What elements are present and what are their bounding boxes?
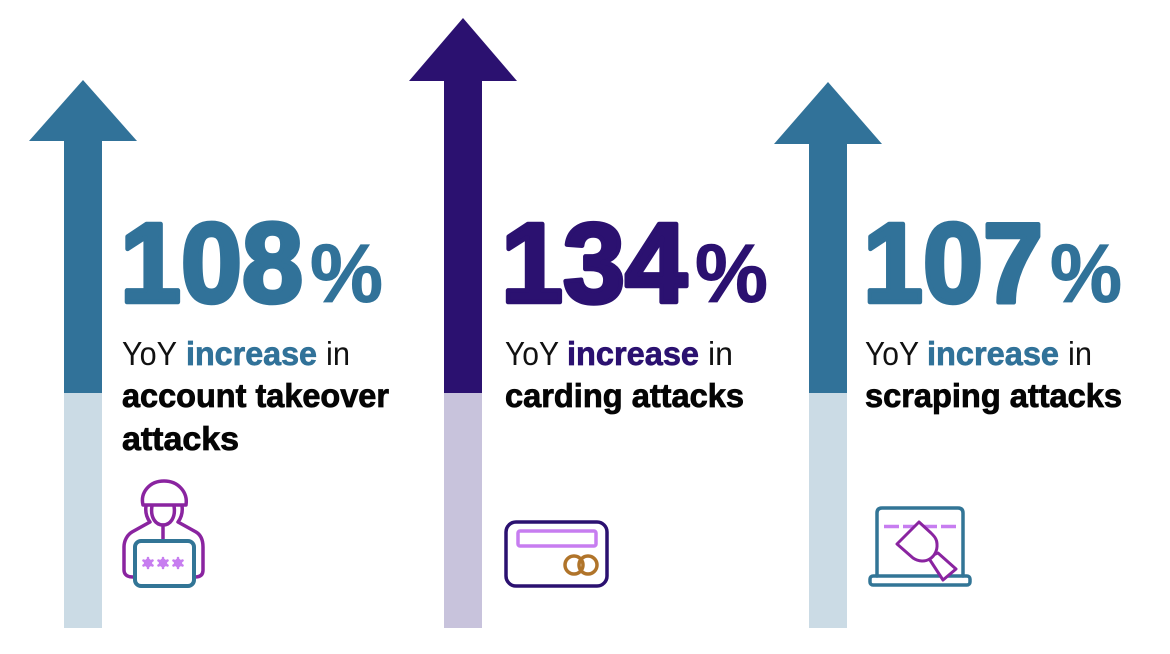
panel: carding — [409, 18, 768, 628]
icon: laptop with magnifier — [870, 508, 970, 585]
icon: credit card — [506, 522, 607, 586]
text: account takeover description: YoY — [122, 335, 177, 372]
text: carding description: increase — [567, 335, 699, 372]
text: scraping description: in — [1068, 335, 1092, 372]
stat: 134%: 134 — [501, 200, 687, 326]
panel: account takeover — [29, 80, 389, 628]
text: scraping description — [865, 335, 1122, 414]
text: scraping description: scraping attacks — [865, 377, 1122, 414]
text: account takeover description: account takeover — [122, 377, 389, 414]
text: account takeover description: increase — [186, 335, 317, 372]
stat: 108%: 108 — [120, 200, 303, 326]
text: carding description: in — [708, 335, 733, 372]
panel: scraping — [774, 82, 1122, 628]
text: carding description: YoY — [505, 335, 559, 372]
text: carding description — [505, 335, 744, 414]
stat: 134%: % — [695, 227, 768, 320]
stat: 107%: % — [1050, 227, 1122, 320]
arrow: account takeover — [29, 80, 137, 628]
icon: hooded hacker with laptop — [124, 481, 203, 586]
text: scraping description: increase — [927, 335, 1059, 372]
text: carding description: carding attacks — [505, 377, 744, 414]
stat: 107%: 107 — [863, 200, 1043, 326]
arrow: carding — [409, 18, 517, 628]
arrow: scraping — [774, 82, 882, 628]
text: account takeover description — [122, 335, 389, 457]
text: scraping description: YoY — [865, 335, 919, 372]
text: account takeover description: attacks — [122, 420, 239, 457]
stat: 108%: % — [310, 227, 383, 320]
text: account takeover description: in — [326, 335, 350, 372]
